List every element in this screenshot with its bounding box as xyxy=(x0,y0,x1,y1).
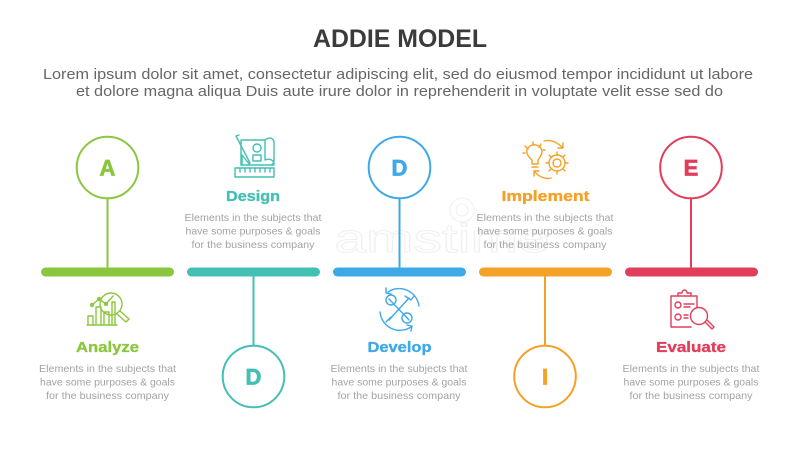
step: Evaluate xyxy=(622,137,760,402)
heading: Design: Design xyxy=(226,188,280,205)
connector and bar: Evaluate xyxy=(625,198,758,276)
heading: Analyze: Analyze xyxy=(76,339,139,356)
step: Implement xyxy=(476,140,614,407)
text: Design xyxy=(184,212,322,251)
connector and bar: Develop xyxy=(333,198,466,276)
text: Evaluate xyxy=(622,363,760,402)
icon: crossed wrenches with arrows xyxy=(380,288,419,331)
text: Analyze: for the business company xyxy=(46,390,170,402)
watermark xyxy=(334,198,550,261)
circle: I xyxy=(514,346,576,407)
icon: chart with magnifier xyxy=(87,293,129,325)
subtitle xyxy=(43,66,753,100)
text: Design: Elements in the subjects that xyxy=(184,212,322,224)
text: Develop: for the business company xyxy=(338,390,461,402)
icon: blueprint and ruler xyxy=(235,135,274,177)
heading: Implement: Implement xyxy=(502,188,590,205)
watermark: amstime xyxy=(334,217,550,261)
text: Implement: for the business company xyxy=(484,239,607,251)
circle: D: D xyxy=(392,156,407,180)
circle: D: D xyxy=(246,364,261,390)
text: Implement: have some purposes & goals xyxy=(478,226,612,238)
connector and bar: Analyze xyxy=(41,198,174,276)
subtitle: Lorem ipsum dolor sit amet, consectetur adipiscing elit, sed do eiusmod tempor incididunt ut labore xyxy=(43,66,753,83)
heading: Evaluate: Evaluate xyxy=(656,339,726,356)
circle: E xyxy=(660,137,722,198)
heading: Develop: Develop xyxy=(368,339,432,356)
text: Develop: have some purposes & goals xyxy=(332,376,466,388)
text: Implement: Elements in the subjects that xyxy=(476,212,614,224)
subtitle: et dolore magna aliqua Duis aute irure dolor in reprehenderit in voluptate velit esse sed do xyxy=(76,83,723,100)
text: Develop: Elements in the subjects that xyxy=(330,363,468,375)
text: Analyze: Elements in the subjects that xyxy=(39,363,176,375)
text: Analyze xyxy=(39,363,176,402)
circle: E: E xyxy=(684,156,698,180)
circle: D xyxy=(369,137,430,198)
text: Analyze: have some purposes & goals xyxy=(40,376,175,388)
connector and bar: Implement xyxy=(479,268,612,346)
step: Design xyxy=(184,135,322,407)
circle: A: A xyxy=(100,156,116,180)
text: Evaluate: Elements in the subjects that xyxy=(622,363,760,375)
text: Design: have some purposes & goals xyxy=(186,226,320,238)
text: Develop xyxy=(330,363,468,402)
circle: A xyxy=(77,137,138,198)
text: Design: for the business company xyxy=(192,239,315,251)
text: Evaluate: have some purposes & goals xyxy=(624,376,758,388)
circle: I: I xyxy=(542,364,548,390)
connector and bar: Design xyxy=(187,268,320,346)
title: ADDIE MODEL xyxy=(313,25,487,53)
step: Develop xyxy=(330,137,468,402)
text: Evaluate: for the business company xyxy=(630,390,753,402)
icon: light bulb and gear xyxy=(523,140,568,179)
step: Analyze xyxy=(39,137,176,402)
text: Implement xyxy=(476,212,614,251)
icon: clipboard with magnifier xyxy=(671,290,714,329)
circle: D xyxy=(223,346,284,407)
